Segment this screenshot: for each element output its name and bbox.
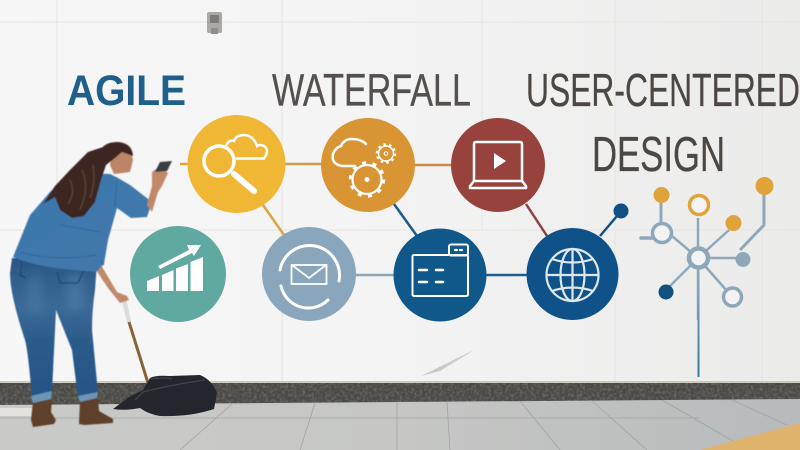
- yellow floor strip: [700, 423, 800, 450]
- shirt: [13, 173, 152, 272]
- jeans: [10, 258, 98, 398]
- jeans cuffs: [31, 391, 98, 403]
- lower arm to cane: [96, 265, 129, 303]
- network tree diagram: [641, 177, 774, 377]
- hair curls: [68, 165, 94, 210]
- person: [10, 142, 172, 427]
- heading: Waterfall: WATERFALL: [272, 64, 471, 116]
- wall sensor box: [207, 12, 222, 34]
- skirting band: [0, 381, 800, 405]
- node: globe: [526, 228, 618, 320]
- connector lines: [180, 164, 617, 275]
- hair: [43, 142, 133, 218]
- raised forearm: [147, 166, 168, 212]
- cane: [122, 298, 148, 383]
- node: search cloud: [188, 115, 286, 213]
- node: mail: [262, 227, 356, 321]
- denim fades and seams: [20, 262, 84, 317]
- node: browser window: [394, 228, 486, 322]
- heading: Agile: AGILE: [67, 67, 186, 115]
- scuff mark: [421, 350, 474, 376]
- node: cloud and gears: [321, 118, 415, 212]
- backpack: [113, 375, 217, 416]
- node: growth chart: [130, 226, 226, 322]
- node: laptop play: [451, 118, 545, 212]
- head: [110, 150, 133, 174]
- phone: [155, 161, 172, 172]
- heading: User-Centered Design: DESIGN: [592, 128, 725, 182]
- floor: [0, 398, 800, 450]
- boots: [31, 397, 113, 427]
- end dot on globe connector: [614, 204, 628, 218]
- heading: User-Centered Design: [526, 64, 800, 182]
